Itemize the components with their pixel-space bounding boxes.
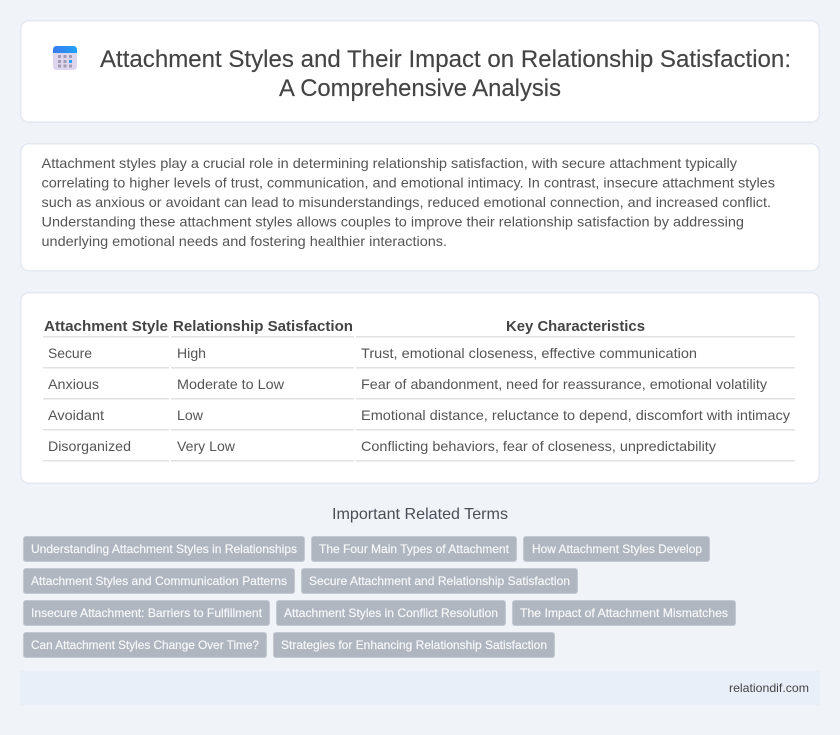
- tag: [24, 568, 294, 594]
- table row: anxious: Anxious: [48, 376, 99, 392]
- tag: [276, 600, 506, 626]
- table header: Relationship Satisfaction: [173, 319, 353, 335]
- table row: avoidant: Emotional distance, reluctance to depend, discomfort with intimacy: [361, 407, 790, 423]
- title: Attachment Styles and Their Impact on Relationship Satisfaction:: [100, 46, 791, 73]
- tag: [512, 600, 736, 626]
- title: A Comprehensive Analysis: [279, 75, 561, 102]
- tag: [24, 536, 304, 562]
- text block: introduction: such as anxious or avoidant can lead to misunderstandings, reduced emotional connection, and increased conflict.: [42, 194, 771, 210]
- table row: disorganized: Very Low: [177, 438, 236, 454]
- tags: related terms: [24, 536, 736, 658]
- text block: introduction: underlying emotional needs and fostering healthier interactions.: [42, 233, 447, 249]
- table row: disorganized: [43, 438, 795, 462]
- table row: avoidant: [43, 407, 795, 430]
- panel: header: [21, 21, 819, 122]
- tag: [274, 632, 554, 658]
- tag: [524, 536, 710, 562]
- text block: introduction: Attachment styles play a crucial role in determining relationship satisfaction, with secure attachment typically: [42, 155, 737, 171]
- table row: secure: Trust, emotional closeness, effective communication: [361, 345, 697, 361]
- text block: introduction: [42, 155, 775, 249]
- table header: [43, 319, 795, 338]
- table row: anxious: Moderate to Low: [177, 376, 285, 392]
- tag: Can Attachment Styles Change Over Time?: [31, 638, 259, 652]
- tag: Secure Attachment and Relationship Satisfaction: [309, 574, 570, 588]
- tag: [312, 536, 516, 562]
- tag: Attachment Styles in Conflict Resolution: [284, 606, 498, 620]
- footer: [20, 671, 820, 705]
- table row: disorganized: Conflicting behaviors, fear of closeness, unpredictability: [361, 438, 716, 454]
- tag: The Impact of Attachment Mismatches: [520, 606, 728, 620]
- tag: Attachment Styles and Communication Patterns: [31, 574, 287, 588]
- tag: [24, 600, 270, 626]
- tag: How Attachment Styles Develop: [532, 542, 702, 556]
- table header: Key Characteristics: [506, 319, 645, 335]
- table row: avoidant: Low: [177, 407, 204, 423]
- table row: secure: Secure: [48, 345, 92, 361]
- tag: Insecure Attachment: Barriers to Fulfillment: [31, 606, 263, 620]
- panel: introduction: [21, 144, 819, 271]
- tag: The Four Main Types of Attachment: [319, 542, 510, 556]
- tag: [302, 568, 578, 594]
- table row: secure: High: [177, 345, 206, 361]
- table header: Attachment Style: [44, 319, 168, 335]
- table row: disorganized: Disorganized: [48, 438, 131, 454]
- footer: relationdif.com: [729, 681, 809, 695]
- text block: introduction: correlating to higher levels of trust, communication, and emotional intimacy. In contrast, insecure attachment styles: [42, 174, 775, 190]
- icon: calendar: [53, 46, 77, 70]
- panel: table: [21, 293, 819, 483]
- text block: introduction: Understanding these attachment styles allows couples to improve their relationship satisfaction by addressing: [42, 214, 744, 230]
- tag: Understanding Attachment Styles in Relationships: [31, 542, 297, 556]
- heading: important related terms: Important Related Terms: [332, 506, 508, 523]
- table row: anxious: Fear of abandonment, need for reassurance, emotional volatility: [361, 376, 767, 392]
- table row: secure: [43, 345, 795, 368]
- tag: [24, 632, 266, 658]
- title: [100, 46, 791, 102]
- table row: avoidant: Avoidant: [48, 407, 104, 423]
- tag: Strategies for Enhancing Relationship Satisfaction: [281, 638, 547, 652]
- table row: anxious: [43, 376, 795, 400]
